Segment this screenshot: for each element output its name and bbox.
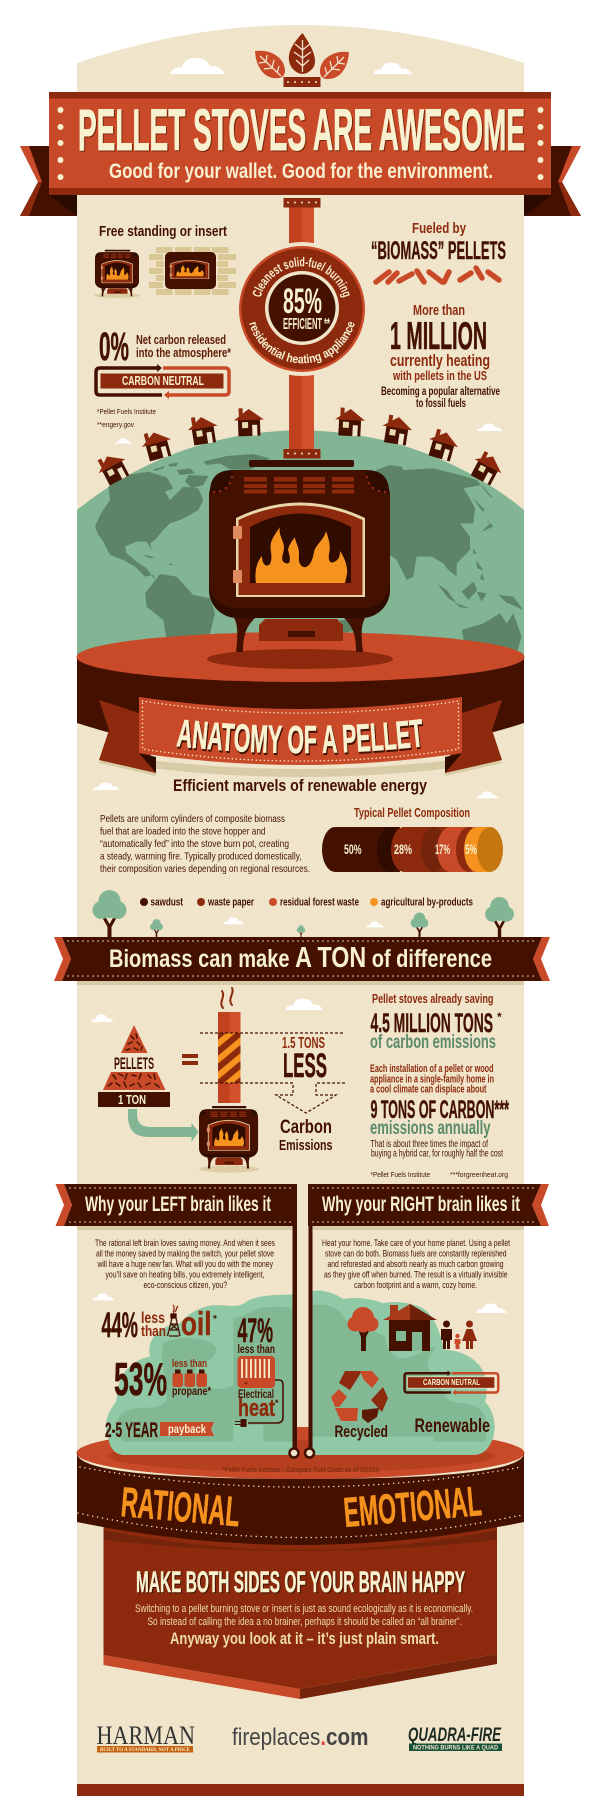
icon: house	[383, 1304, 437, 1351]
pellet description: a steady, warming fire. Typically produced domestically,	[100, 850, 302, 862]
fueled by text	[371, 220, 506, 265]
one million stat	[381, 302, 500, 410]
call to action copy: Switching to a pellet burning stove or insert is just as sound ecologically as it is economically.	[135, 1603, 473, 1615]
call to action copy: Anyway you look at it – it’s just plain smart.	[170, 1629, 439, 1648]
sources: **engery.gov	[97, 420, 134, 429]
one million stat: 1 MILLION	[390, 315, 487, 358]
call to action copy: So instead of calling the idea a no brainer, perhaps it should be called an “all brainer”.	[148, 1616, 462, 1628]
houses on the globe	[93, 407, 507, 487]
icon: red tree	[348, 1307, 378, 1351]
left brain paragraph: eco-conscious citizen, you?	[144, 1280, 227, 1291]
stat: payback: 2-5 YEAR	[105, 1419, 158, 1442]
composition legend: waste paper	[207, 896, 255, 908]
savings stats: *	[497, 1010, 502, 1024]
logo: Quadra-Fire: QUADRA-FIRE	[408, 1725, 502, 1746]
ton banner heading: Biomass can make A TON of difference	[109, 942, 492, 974]
icon: propane tanks	[172, 1370, 207, 1387]
equals sign	[182, 1054, 198, 1065]
anatomy heading: ANATOMY OF A PELLET	[176, 719, 424, 756]
composition legend: sawdust	[150, 896, 183, 908]
stat: 47 percent less than electric heat	[235, 1312, 283, 1426]
stat: 44 percent less than oil: *	[213, 1314, 217, 1325]
less carbon text: 1.5 TONS	[282, 1035, 325, 1052]
logo: Quadra-Fire	[408, 1725, 502, 1752]
stat: 44 percent less than oil	[102, 1305, 217, 1345]
emotional label: EMOTIONAL	[342, 1477, 483, 1536]
composition legend	[140, 896, 473, 908]
pellet description: “automatically fed” into the stove burn pot, creating	[100, 838, 289, 850]
composition barrel chart: 28%	[394, 841, 412, 857]
savings stats: a cool climate can displace about	[370, 1084, 487, 1096]
savings stats: emissions annually	[370, 1118, 491, 1139]
one million stat: currently heating	[390, 352, 490, 370]
call to action panel	[104, 1520, 497, 1699]
fuel cost footnote: *Pellet Fuels Institute - Compare Fuel Costs as of 1/2013	[222, 1465, 379, 1474]
globe with continents	[77, 430, 524, 656]
carbon neutral badge: CARBON NEUTRAL	[122, 374, 204, 388]
savings stats: That is about three times the impact of	[370, 1139, 488, 1150]
free standing heading: Free standing or insert	[99, 223, 227, 240]
flue pipe	[284, 198, 320, 458]
call to action copy	[135, 1603, 473, 1648]
stat: 44 percent less than oil: oil	[181, 1305, 212, 1342]
icon: insert in brick wall	[149, 247, 236, 295]
right brain paragraph: carbon footprint and a warm, cozy home.	[354, 1280, 477, 1291]
green bush left	[106, 1294, 293, 1455]
icon: oil derrick	[168, 1305, 180, 1336]
one million stat: with pellets in the US	[392, 369, 487, 383]
composition heading: Typical Pellet Composition	[354, 806, 470, 820]
lower platform	[76, 1427, 524, 1479]
composition barrel chart: 50%	[344, 841, 362, 857]
less carbon text: Emissions	[279, 1137, 332, 1154]
stat: 47 percent less than electric heat: less than	[238, 1342, 275, 1356]
stat: 53 percent less than propane: 53%	[114, 1353, 167, 1405]
savings stats: Pellet stoves already saving	[372, 991, 494, 1006]
savings stats: *Pellet Fuels Institute	[370, 1170, 430, 1179]
icon: free standing stove	[94, 250, 140, 298]
right brain paragraph: and reforested and absorb nearly as much carbon growing	[328, 1259, 504, 1270]
pellet description: Pellets are uniform cylinders of composite biomass	[100, 813, 285, 825]
icon: stove with pellets	[199, 1106, 259, 1172]
savings stats: of carbon emissions	[370, 1032, 496, 1053]
less carbon text: LESS	[283, 1047, 327, 1085]
efficiency badge	[239, 242, 365, 376]
icon: recycle arrows	[331, 1371, 388, 1423]
cream background panel	[77, 25, 524, 1796]
stat: 44 percent less than oil: than	[141, 1323, 166, 1340]
logo: Harman: BUILT TO A STANDARD, NOT A PRICE	[100, 1748, 191, 1753]
right brain paragraph: as they give off when burned. The result is a virtually invisible	[324, 1270, 508, 1280]
pellet pyramid: 1 TON	[118, 1092, 146, 1107]
right brain paragraph	[322, 1238, 510, 1291]
clouds near top	[91, 58, 507, 1313]
efficiency badge: 85%	[283, 282, 322, 321]
stat: 44 percent less than oil: 44%	[102, 1306, 138, 1345]
carbon neutral badge	[96, 364, 229, 399]
subtitle: Good for your wallet. Good for the environment.	[109, 160, 493, 183]
platform with stove shadow	[76, 632, 524, 759]
brain divider lines	[290, 1226, 314, 1458]
curved drum with labels	[77, 1453, 524, 1545]
left brain paragraph: The rational left brain loves saving money. And when it sees	[95, 1238, 275, 1249]
stat: 47 percent less than electric heat: 47%	[238, 1312, 273, 1350]
left brain paragraph: all the money saved by making the switch, your pellet stove	[96, 1248, 274, 1260]
stat: 47 percent less than electric heat: Electrical	[238, 1389, 274, 1401]
logo: Harman: HARMAN	[96, 1721, 195, 1750]
composition legend: residual forest waste	[280, 896, 359, 908]
small carbon neutral badge	[405, 1370, 498, 1395]
one million stat: to fossil fuels	[416, 398, 466, 410]
pellet description: their composition varies depending on regional resources.	[100, 863, 310, 875]
pellet pyramid	[98, 1025, 170, 1107]
zero percent stat: 0%	[99, 325, 129, 369]
right brain paragraph: stove can do both. Biomass fuels are constantly replenished	[325, 1248, 507, 1260]
efficiency badge: EFFICIENT **	[283, 316, 330, 333]
title banner	[49, 92, 551, 195]
icon: large stove	[209, 460, 390, 652]
green bush right	[310, 1291, 495, 1455]
ribbon tail left	[20, 146, 77, 216]
zero percent stat: into the atmosphere*	[136, 346, 231, 360]
pellet pyramid: PELLETS	[114, 1054, 154, 1073]
icon: leaves logo	[255, 33, 349, 87]
recycled label: Recycled	[334, 1422, 388, 1441]
smoke	[221, 988, 233, 1008]
left brain paragraph: you’ll save on heating bills, you extremely intelligent,	[106, 1270, 264, 1280]
small carbon neutral badge: CARBON NEUTRAL	[423, 1377, 480, 1387]
one million stat: Becoming a popular alternative	[381, 386, 500, 398]
fueled by text: Fueled by	[412, 220, 467, 237]
pellet description	[100, 813, 310, 875]
renewable label: Renewable	[414, 1416, 490, 1437]
stat: 44 percent less than oil: less	[141, 1310, 165, 1327]
logo: fireplaces.com: fireplaces.com	[232, 1724, 368, 1751]
savings stats	[370, 991, 509, 1179]
icon: electric heater	[235, 1356, 283, 1426]
sources: *Pellet Fuels Institute	[97, 407, 156, 416]
stat: 47 percent less than electric heat: heat	[238, 1395, 275, 1422]
anatomy subtitle: Efficient marvels of renewable energy	[173, 776, 427, 795]
left brain paragraph	[95, 1238, 275, 1291]
green arrow to stove	[128, 1109, 198, 1142]
logo: Quadra-Fire: NOTHING BURNS LIKE A QUAD	[413, 1746, 499, 1752]
less carbon text: Carbon	[280, 1117, 332, 1138]
savings stats: appliance in a single-family home in	[370, 1074, 494, 1086]
ribbon tail right	[524, 146, 581, 216]
less carbon text	[279, 1035, 332, 1154]
stat: 47 percent less than electric heat: *	[275, 1398, 279, 1408]
dashed carbon arrow	[200, 1033, 347, 1113]
icon: family	[441, 1320, 477, 1349]
trees on ton banner	[92, 890, 514, 937]
zero percent stat: Net carbon released	[136, 333, 226, 347]
zero percent stat	[99, 325, 231, 369]
pellet description: fuel that are loaded into the stove hopper and	[100, 826, 266, 838]
rational label: RATIONAL	[119, 1478, 242, 1535]
left brain paragraph: will have a huge new fan. What will you do with the money	[97, 1259, 273, 1270]
savings stats: Each installation of a pellet or wood	[370, 1063, 494, 1075]
composition barrel chart	[322, 827, 503, 872]
left brain banner	[56, 1184, 297, 1230]
right brain paragraph: Heat your home. Take care of your home planet. Using a pellet	[322, 1238, 510, 1249]
composition legend: agricultural by-products	[381, 896, 473, 908]
composition barrel chart: 5%	[465, 841, 477, 857]
right brain banner	[308, 1184, 549, 1230]
sources	[97, 407, 156, 429]
savings stats: buying a hybrid car, for roughly half the cost	[371, 1148, 503, 1160]
icon: pellets	[376, 268, 499, 282]
bottom bar	[77, 1784, 524, 1796]
efficiency badge: residential heating appliance	[249, 322, 354, 364]
chimney	[218, 1012, 240, 1103]
stat: 53 percent less than propane: less than	[172, 1358, 207, 1370]
stat: payback: payback	[168, 1422, 206, 1436]
one million stat: More than	[413, 302, 465, 319]
anatomy ribbon	[99, 697, 502, 777]
stat: 53 percent less than propane: propane*	[172, 1384, 211, 1398]
efficiency badge: Cleanest solid-fuel burning	[252, 256, 350, 298]
left brain banner: Why your LEFT brain likes it	[85, 1193, 271, 1216]
ton banner	[54, 937, 550, 985]
savings stats: ***forgreenheat.org	[450, 1170, 508, 1179]
composition barrel chart: 17%	[435, 841, 450, 857]
